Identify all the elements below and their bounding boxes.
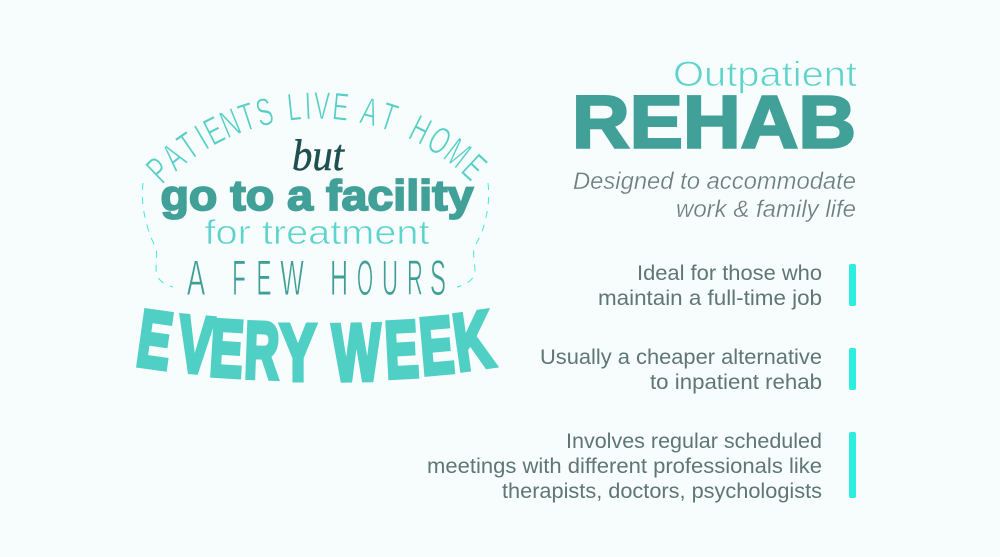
light line: for treatment: for treatment (204, 214, 430, 252)
curved headline: patients live at home: P (138, 149, 180, 191)
heading: outpatient: Outpatient (673, 55, 857, 94)
curved headline: patients live at home: S (252, 89, 277, 135)
bullet 2 text (540, 346, 822, 394)
curved headline: patients live at home: E (454, 146, 495, 189)
subheading: Designed to accommodate (573, 168, 856, 195)
hand-lettered line: a few hours: O (357, 251, 373, 307)
bullet 2 text: Usually a cheaper alternative (540, 346, 822, 369)
curved headline: patients live at home: H (403, 107, 438, 153)
arched banner: every week: E (416, 301, 457, 392)
bullet 3 text: meetings with different professionals like (427, 455, 822, 478)
dashed curve: right (457, 183, 489, 287)
curved headline: patients live at home: E (331, 85, 351, 129)
bullet 2 text: to inpatient rehab (650, 371, 822, 394)
arched banner: every week: V (174, 299, 216, 391)
arched banner: every week: E (383, 305, 420, 396)
curved headline: patients live at home: T (170, 124, 207, 168)
bold line: go to a facility: go to a facility (160, 172, 474, 220)
bullet 1 text: maintain a full-time job (598, 287, 822, 310)
arched banner: every week: K (448, 295, 498, 388)
curved headline: patients live at home: I (304, 84, 312, 128)
script word: but: but (292, 131, 346, 180)
dashed curve: left (142, 183, 173, 287)
hand-lettered line: a few hours: E (256, 251, 272, 307)
curved headline: patients live at home: N (214, 100, 247, 147)
arched banner: every week: Y (280, 309, 316, 398)
curved headline: patients live at home: V (314, 84, 331, 128)
hand-lettered line: a few hours (187, 249, 446, 307)
arched banner: every week: R (243, 305, 281, 396)
hand-lettered line: a few hours: F (232, 251, 246, 307)
subheading: work & family life (676, 196, 856, 223)
hand-lettered line: a few hours: U (382, 251, 398, 307)
curved headline: patients live at home: E (197, 108, 231, 154)
arched banner: every week (132, 294, 498, 398)
curved headline: patients live at home: T (375, 94, 403, 140)
hand-lettered line: a few hours: W (280, 251, 304, 306)
curved headline: patients live at home: M (436, 130, 479, 176)
hand-lettered line: a few hours: A (187, 249, 205, 306)
bullet 1 text: Ideal for those who (637, 262, 822, 285)
curved headline: patients live at home: A (357, 89, 383, 135)
curved headline: patients live at home: O (420, 117, 459, 164)
bullet 3 text (427, 430, 822, 503)
hand-lettered line: a few hours: R (407, 251, 423, 307)
arched banner: every week: E (132, 294, 177, 387)
subheading (573, 168, 856, 223)
hand-lettered line: a few hours: S (430, 252, 446, 306)
hand-lettered line: a few hours: H (330, 251, 348, 306)
arched banner: every week: E (207, 304, 246, 395)
arched banner: every week: W (332, 308, 382, 398)
bullet 3 bar (849, 432, 856, 498)
bullet 1 bar (849, 264, 856, 306)
bullet 2 bar (849, 348, 856, 390)
curved headline: patients live at home: A (154, 135, 194, 179)
bullet 3 text: therapists, doctors, psychologists (502, 480, 822, 503)
curved headline: patients live at home: I (188, 117, 216, 158)
curved headline: patients live at home: L (285, 85, 303, 129)
panel: left typographic badge (132, 84, 498, 398)
bullet 1 text (598, 262, 822, 310)
bullet 3 text: Involves regular scheduled (566, 430, 822, 453)
heading: rehab: REHAB (572, 80, 856, 164)
panel: right column (427, 55, 857, 503)
curved headline: patients live at home: T (233, 94, 261, 140)
curved headline: patients live at home (138, 84, 495, 191)
